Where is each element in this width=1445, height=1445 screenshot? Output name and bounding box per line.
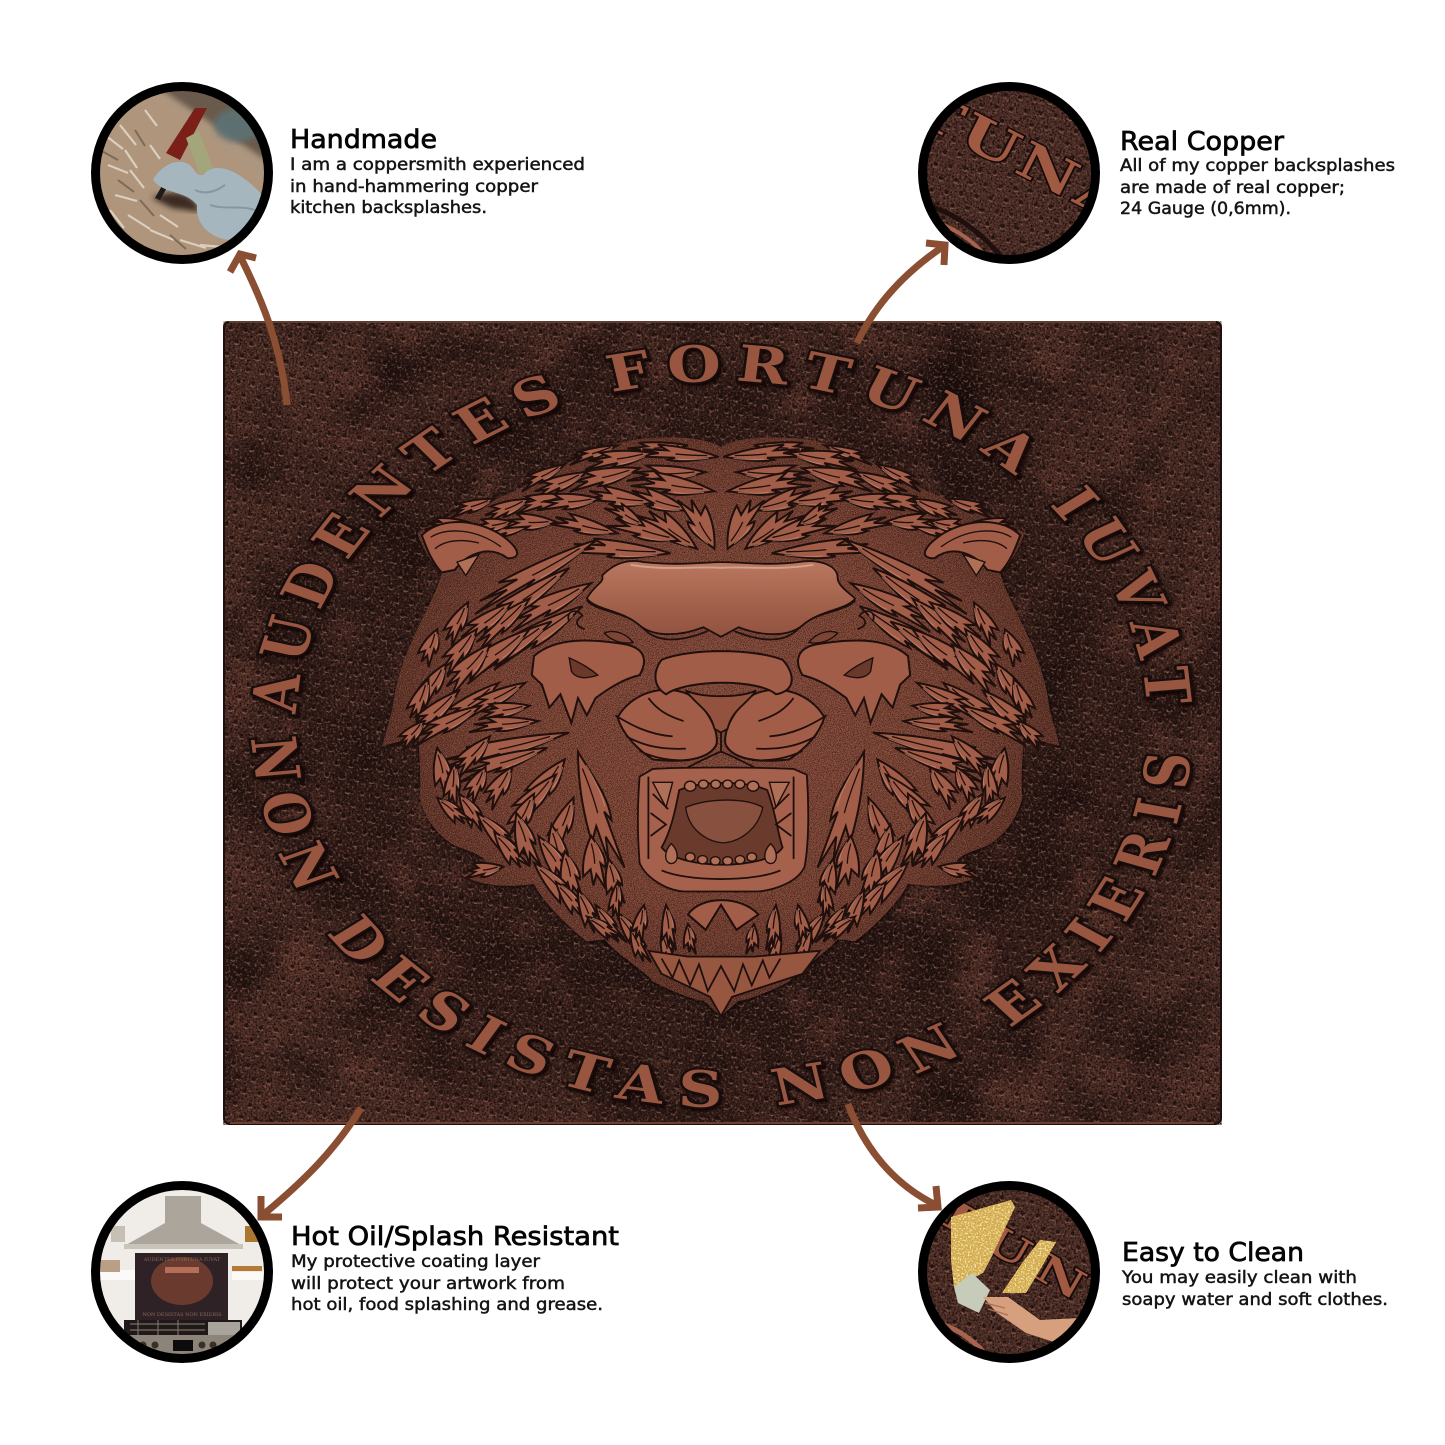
circle photo: kitchen installation [91, 1181, 273, 1365]
mane tufts and facial features, left side [392, 439, 726, 966]
circle photo: cleaning [918, 1181, 1100, 1363]
muzzle and nose [655, 651, 792, 767]
open mouth [638, 768, 808, 892]
arrow: panel to real copper [857, 243, 945, 343]
curved inscription: bottom: NON DESISTAS NON EXIERIS [248, 734, 1196, 1113]
text: hot oil splash resistant: hot oil, food splashing and grease. [291, 1295, 603, 1315]
text: real copper: Real Copper [1120, 127, 1284, 157]
circle photo: handmade [91, 82, 273, 264]
forehead plate [587, 561, 855, 637]
text: real copper: 24 Gauge (0,6mm). [1120, 199, 1291, 219]
panel: hammered copper backsplash [223, 321, 1222, 1125]
circle photo: cleaning: TUNA [929, 1187, 1153, 1344]
circle photo: real copper [918, 82, 1100, 264]
text: handmade: Handmade [290, 125, 437, 155]
text: hot oil splash resistant: Hot Oil/Splash Resistant [291, 1222, 619, 1252]
circle photo: real copper: TUNA [902, 77, 1142, 238]
lion head relief [380, 430, 1062, 1020]
text: real copper: are made of real copper; [1120, 178, 1345, 198]
text: easy to clean: soapy water and soft clothes. [1122, 1290, 1388, 1310]
text: handmade: kitchen backsplashes. [290, 198, 487, 218]
circle photo: kitchen installation: AUDENTES FORTUNA IUVAT [143, 1257, 221, 1263]
text: handmade: in hand-hammering copper [290, 177, 538, 197]
circle photo: kitchen installation: NON DESISTAS NON EXIERIS [142, 1312, 222, 1318]
text: handmade: I am a coppersmith experienced [290, 155, 585, 175]
text: easy to clean: Easy to Clean [1122, 1238, 1304, 1268]
text: hot oil splash resistant: will protect your artwork from [291, 1274, 565, 1294]
head silhouette [382, 437, 1060, 1016]
arrow: panel to easy clean [848, 1104, 938, 1208]
chin and beard [648, 900, 820, 1016]
arrow: panel to splash resistant [261, 1108, 361, 1217]
text: hot oil splash resistant [291, 1222, 619, 1315]
text: real copper: All of my copper backsplashes [1120, 156, 1395, 176]
text: easy to clean: You may easily clean with [1121, 1268, 1357, 1288]
stippled head texture [380, 430, 1062, 1020]
text: hot oil splash resistant: My protective coating layer [291, 1252, 540, 1272]
text: handmade [290, 125, 585, 218]
mane tufts and facial features, right side [716, 439, 1050, 966]
text: real copper [1120, 127, 1395, 219]
arrow: panel to handmade [230, 254, 287, 405]
text: easy to clean [1121, 1238, 1388, 1310]
curved inscription: top: AUDENTES FORTUNA IUVAT [250, 342, 1198, 720]
